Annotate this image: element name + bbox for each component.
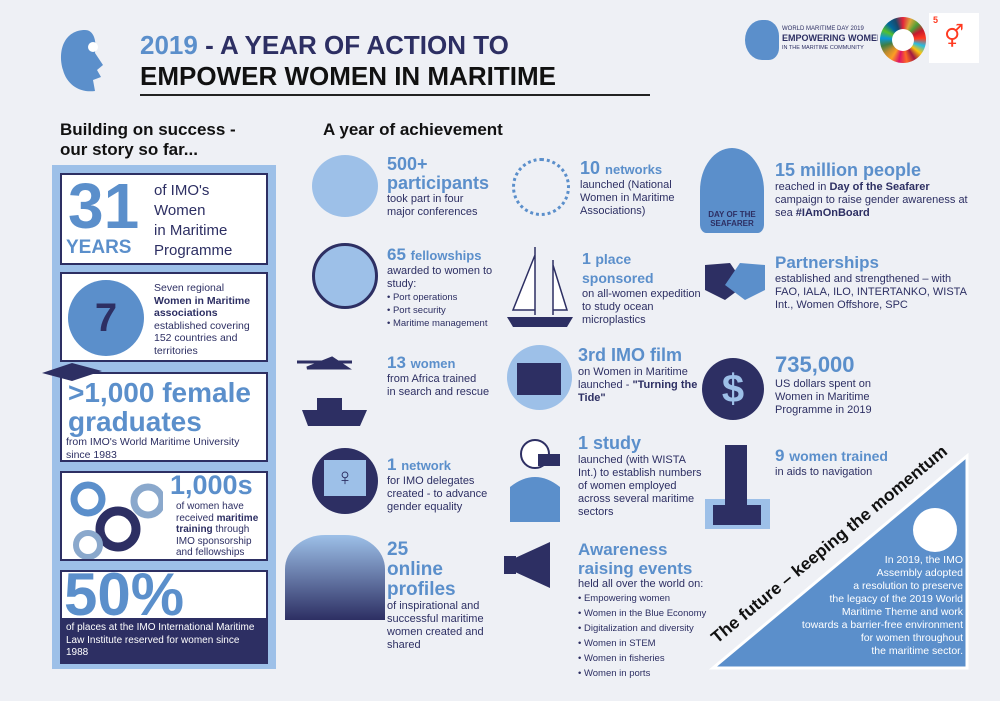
text: of inspirational and successful maritime women created and shared	[387, 600, 484, 651]
box gears: and fellowships	[176, 547, 244, 558]
col3: DAY OF THE SEAFARER	[708, 210, 756, 228]
text: Women in STEM	[584, 638, 656, 649]
logos top right	[745, 13, 979, 63]
logo head	[60, 30, 103, 92]
text: Women in the Blue Economy	[584, 608, 706, 619]
text: 1 place	[582, 251, 631, 268]
future triangle: The future – keeping the momentum	[707, 448, 951, 647]
box graduates: since 1983	[66, 449, 117, 461]
box 31 years	[60, 173, 268, 265]
col2	[512, 158, 570, 216]
text: 1 network	[387, 455, 451, 474]
text: in aids to navigation	[775, 466, 872, 478]
heading achievement: A year of achievement	[323, 120, 503, 139]
future triangle: for women throughout	[861, 632, 963, 644]
box gears: 1,000s	[170, 470, 253, 500]
future triangle: a resolution to preserve	[853, 580, 963, 592]
text: Women in ports	[584, 668, 650, 679]
text: $	[722, 367, 744, 411]
box 31 years: 31	[68, 170, 139, 242]
box gears: training through	[176, 524, 249, 535]
text: 65 fellowships	[387, 245, 481, 264]
box 7 associations	[60, 272, 268, 362]
text: from Africa trained	[387, 373, 476, 385]
future triangle: the maritime sector.	[871, 645, 963, 657]
future triangle: In 2019, the IMO	[885, 554, 963, 566]
box graduates: graduates	[68, 406, 202, 437]
box 31 years: Programme	[154, 242, 232, 259]
text: 9 women trained	[775, 446, 888, 465]
future triangle: Assembly adopted	[877, 567, 963, 579]
future triangle: towards a barrier-free environment	[802, 619, 963, 631]
text: 735,000	[775, 352, 855, 377]
text: established and strengthened – with FAO, IALA, ILO, INTERTANKO, WISTA Int., Women Offshore, SPC	[775, 273, 966, 311]
text: launched (with WISTA Int.) to establish numbers of women employed across several maritime sectors	[578, 454, 702, 518]
text: 500+	[387, 154, 428, 174]
text: reached in Day of the Seafarer campaign to raise gender awareness at sea #IAmOnBoard	[775, 181, 968, 219]
box graduates: >1,000 female	[68, 377, 251, 408]
text: US dollars spent on	[775, 378, 871, 390]
future triangle: the legacy of the 2019 World	[830, 593, 963, 605]
box gears: of women have	[176, 501, 244, 512]
text: online	[387, 559, 443, 580]
box gears: received maritime	[176, 512, 258, 524]
text: Maritime management	[393, 318, 487, 329]
logos top right: WORLD MARITIME DAY 2019	[782, 26, 864, 32]
left heading: our story so far...	[60, 140, 198, 159]
text: ♀	[336, 464, 354, 491]
logos top right: IN THE MARITIME COMMUNITY	[782, 45, 864, 51]
box graduates	[60, 372, 268, 462]
col1	[312, 155, 378, 217]
text: Women in fisheries	[584, 653, 665, 664]
left panel	[52, 165, 276, 669]
text: Programme in 2019	[775, 404, 872, 416]
text: Empowering women	[584, 593, 670, 604]
box 31 years: Women	[154, 202, 205, 219]
box 7 associations: Women in Maritime associations	[154, 294, 250, 319]
title	[140, 30, 650, 96]
box 7 associations: established covering 152 countries and territories	[154, 320, 250, 356]
text: 10 networks	[580, 158, 662, 178]
box 50%	[60, 570, 268, 664]
text: sponsored	[582, 270, 654, 286]
text: for IMO delegates created - to advance gender equality	[387, 475, 487, 513]
text: Awareness	[578, 540, 667, 559]
text: 13 women	[387, 353, 455, 372]
title: 2019 - A YEAR OF ACTION TO	[140, 30, 509, 60]
text: launched (National Women in Maritime Associations)	[580, 179, 675, 217]
box 31 years: YEARS	[66, 237, 131, 258]
text: raising events	[578, 559, 692, 578]
box gears: IMO sponsorship	[176, 536, 252, 546]
box gears	[60, 471, 268, 561]
mortar board icon	[42, 363, 102, 381]
text: held all over the world on:	[578, 578, 703, 590]
text: profiles	[387, 579, 456, 600]
text: awarded to women to study:	[387, 265, 492, 290]
left heading: Building on success -	[60, 120, 236, 139]
text: Port security	[393, 305, 446, 316]
text: participants	[387, 173, 489, 193]
text: on all-women expedition to study ocean microplastics	[582, 288, 701, 326]
logos top right: ⚥	[944, 24, 964, 49]
text: Port operations	[393, 292, 457, 303]
text: Women in Maritime	[775, 391, 870, 403]
future triangle: Maritime Theme and work	[842, 606, 963, 618]
box 7 associations: Seven regional	[154, 282, 224, 294]
left heading	[60, 120, 236, 159]
text: on Women in Maritime launched - "Turning the Tide"	[578, 366, 697, 404]
text: Digitalization and diversity	[584, 623, 694, 634]
logos top right: 5	[933, 15, 938, 25]
box 31 years: of IMO's	[154, 182, 209, 199]
text: Partnerships	[775, 253, 879, 272]
box 50%: of places at the IMO International Maritime Law Institute reserved for women since 1988	[66, 622, 254, 658]
box graduates: from IMO's World Maritime University	[66, 436, 239, 448]
text: major conferences	[387, 206, 478, 218]
col3	[700, 148, 764, 233]
text: in search and rescue	[387, 386, 489, 398]
text: 25	[387, 539, 408, 560]
text: 15 million people	[775, 160, 921, 180]
title: EMPOWER WOMEN IN MARITIME	[140, 61, 556, 91]
text: took part in four	[387, 193, 463, 205]
text: 1 study	[578, 433, 641, 453]
box 31 years: in Maritime	[154, 222, 227, 239]
text: 3rd IMO film	[578, 345, 682, 365]
box 7 associations: 7	[95, 296, 117, 340]
